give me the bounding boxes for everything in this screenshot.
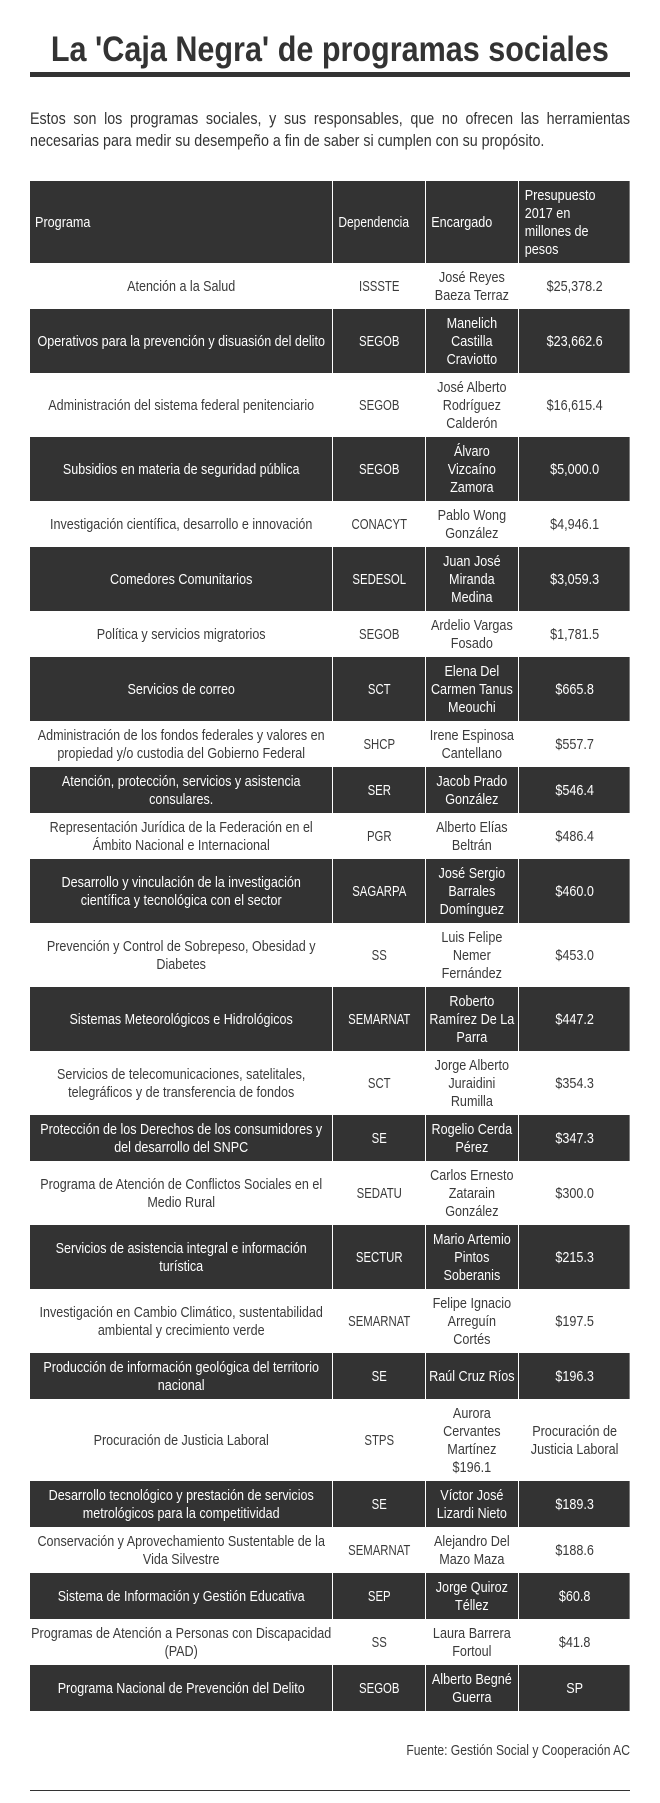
row: Justicia Laboral: Procuración de Justicia Laboral [94, 1432, 269, 1449]
row: Atención a la Salud: Baeza Terraz [435, 287, 509, 304]
row: Conflictos Sociales: Programa de Atención de Conflictos Sociales en el [40, 1176, 322, 1193]
row: Cambio Climático [30, 1289, 630, 1353]
row: Vida Silvestre: Conservación y Aprovechamiento Sustentable de la [37, 1533, 325, 1550]
row: Turística: SECTUR [356, 1249, 402, 1266]
row: Representación Jurídica: Alberto Elías [436, 819, 508, 836]
row: Sobrepeso: Nemer [453, 947, 491, 964]
table header row: Presupuesto [525, 187, 596, 204]
row: Gestión Educativa: Téllez [455, 1597, 489, 1614]
row: Operativos: Manelich [447, 315, 497, 332]
table header row: pesos [525, 241, 558, 258]
row: Fondos federales: $557.7 [555, 736, 594, 753]
row: Consulares: $546.4 [555, 782, 594, 799]
row: Atención a la Salud: $25,378.2 [547, 278, 603, 295]
table header row: millones de [525, 223, 589, 240]
row: Conflictos Sociales: González [445, 1203, 499, 1220]
intro text: Estos son los programas sociales, y sus responsables, que no ofrecen las herramientas [30, 109, 630, 128]
row: Discapacidad: (PAD) [165, 1643, 198, 1660]
row: Gestión Educativa [30, 1573, 630, 1619]
row: Desarrollo y vinculación: $460.0 [555, 883, 594, 900]
row: Justicia Laboral: Cervantes [443, 1423, 501, 1440]
row: Conflictos Sociales [30, 1161, 630, 1225]
row: Consulares: SER [367, 782, 391, 799]
row: Subsidios: SEGOB [359, 461, 399, 478]
intro text: necesarias para medir su desempeño a fin de saber si cumplen con su propósito. [30, 131, 544, 150]
row: Gestión Educativa: $60.8 [559, 1588, 590, 1605]
row: Vida Silvestre: $188.6 [555, 1542, 594, 1559]
row: Correo [30, 657, 630, 721]
table: programas sociales [30, 181, 630, 1711]
row: Correo: $665.8 [555, 681, 594, 698]
row: Investigación científica [30, 501, 630, 547]
row: Consumidores [30, 1115, 630, 1161]
row: Sistema penitenciario: Calderón [446, 415, 497, 432]
row: Justicia Laboral: $196.1 [453, 1459, 491, 1476]
row: Subsidios: Subsidios en materia de seguridad pública [63, 461, 299, 478]
row: Meteorológicos: SEMARNAT [348, 1011, 410, 1028]
row: Justicia Laboral: Justicia Laboral [531, 1441, 618, 1458]
row: Atención a la Salud: ISSSTE [359, 278, 399, 295]
row: Geológica: nacional [158, 1377, 205, 1394]
row: Atención a la Salud: Atención a la Salud [127, 278, 235, 295]
row: Política migratoria: $1,781.5 [550, 626, 599, 643]
row: Consulares: Atención, protección, servicios y asistencia [62, 773, 300, 790]
row: Geológica: $196.3 [555, 1368, 594, 1385]
row: Turística: Servicios de asistencia integral e información [56, 1240, 307, 1257]
row: Comedores: Medina [451, 589, 493, 606]
table header row [30, 181, 630, 263]
row: Telecomunicaciones: $354.3 [555, 1075, 594, 1092]
row: Prevención del Delito: SEGOB [359, 1680, 399, 1697]
row: Turística: $215.3 [555, 1249, 594, 1266]
table header row: Programa [35, 214, 90, 231]
row: Discapacidad: Programas de Atención a Personas con Discapacidad [31, 1625, 331, 1642]
row: Conflictos Sociales: SEDATU [356, 1185, 401, 1202]
row: Geológica: Raúl Cruz Ríos [429, 1368, 515, 1385]
row: Sistema penitenciario: Rodríguez [443, 397, 501, 414]
row: Subsidios: Vizcaíno [448, 461, 496, 478]
table header row: 2017 en [525, 205, 570, 222]
row: Consumidores: Protección de los Derechos de los consumidores y [40, 1121, 322, 1138]
row: Turística: Mario Artemio [433, 1231, 511, 1248]
row: Justicia Laboral: Aurora [453, 1405, 491, 1422]
row: Conflictos Sociales: Medio Rural [147, 1194, 215, 1211]
title underline bar [30, 72, 630, 77]
row: Sobrepeso [30, 923, 630, 987]
row: Justicia Laboral: STPS [364, 1432, 394, 1449]
row: Telecomunicaciones: SCT [368, 1075, 390, 1092]
row: Conflictos Sociales: $300.0 [555, 1185, 594, 1202]
row: Conflictos Sociales: Carlos Ernesto [430, 1167, 514, 1184]
row: Política migratoria: SEGOB [359, 626, 399, 643]
row: Consumidores: Rogelio Cerda [432, 1121, 512, 1138]
row: Sistema penitenciario: $16,615.4 [547, 397, 603, 414]
row: Correo: Meouchi [448, 699, 496, 716]
row: Investigación científica: González [445, 525, 498, 542]
row: Correo: Servicios de correo [127, 681, 235, 698]
row: Sobrepeso: Luis Felipe [441, 929, 502, 946]
row: Consulares [30, 767, 630, 813]
row: Sistema penitenciario: SEGOB [359, 397, 399, 414]
row: Operativos: Craviotto [447, 351, 497, 368]
row: Subsidios: $5,000.0 [550, 461, 599, 478]
row: Cambio Climático: ambiental y crecimiento verde [98, 1322, 265, 1339]
row: Cambio Climático: Cortés [453, 1331, 490, 1348]
row: Subsidios [30, 437, 630, 501]
row: Subsidios: Álvaro [454, 443, 490, 460]
row: Metrológicos: $189.3 [555, 1496, 594, 1513]
row: Sobrepeso: $453.0 [555, 947, 594, 964]
table header row: Encargado [431, 214, 492, 231]
row: Desarrollo y vinculación: Domínguez [440, 901, 504, 918]
row: Sobrepeso: Prevención y Control de Sobrepeso, Obesidad y [47, 938, 316, 955]
row: Metrológicos: metrológicos para la competitividad [83, 1505, 280, 1522]
row: Metrológicos: Lizardi Nieto [437, 1505, 507, 1522]
row: Discapacidad: Fortoul [452, 1643, 491, 1660]
row: Subsidios: Zamora [450, 479, 494, 496]
row: Comedores [30, 547, 630, 611]
row: Meteorológicos: Roberto [449, 993, 494, 1010]
row: Operativos: Operativos para la prevención y disuasión del delito [37, 333, 325, 350]
row: Prevención del Delito: Guerra [452, 1689, 491, 1706]
row: Representación Jurídica: PGR [367, 828, 391, 845]
row: Fondos federales: Administración de los fondos federales y valores en [38, 727, 325, 744]
row: Cambio Climático: Investigación en Cambio Climático, sustentabilidad [40, 1304, 323, 1321]
intro text [30, 109, 630, 150]
row: Operativos: SEGOB [359, 333, 399, 350]
row: Consumidores: SE [371, 1130, 386, 1147]
row: Gestión Educativa: Jorge Quiroz [436, 1579, 508, 1596]
row: Investigación científica: Pablo Wong [438, 507, 506, 524]
row: Meteorológicos: Sistemas Meteorológicos e Hidrológicos [70, 1011, 293, 1028]
row: Turística: Soberanis [443, 1267, 500, 1284]
row: Representación Jurídica: $486.4 [555, 828, 594, 845]
row: Discapacidad [30, 1619, 630, 1665]
row: Telecomunicaciones [30, 1051, 630, 1115]
row: Política migratoria [30, 611, 630, 657]
row: Justicia Laboral: Procuración de [532, 1423, 617, 1440]
row: Geológica: Producción de información geológica del territorio [43, 1359, 319, 1376]
row: Fondos federales: propiedad y/o custodia del Gobierno Federal [57, 745, 305, 762]
row: Sobrepeso: SS [371, 947, 386, 964]
row: Metrológicos: SE [371, 1496, 386, 1513]
row: Meteorológicos [30, 987, 630, 1051]
row: Discapacidad: $41.8 [559, 1634, 590, 1651]
row: Consulares: Jacob Prado [436, 773, 507, 790]
row: Vida Silvestre: Alejandro Del [434, 1533, 510, 1550]
row: Sistema penitenciario: José Alberto [437, 379, 507, 396]
row: Representación Jurídica [30, 813, 630, 859]
row: Sistema penitenciario: Administración del sistema federal penitenciario [48, 397, 314, 414]
row: Prevención del Delito: SP [566, 1680, 583, 1697]
row: Vida Silvestre: SEMARNAT [348, 1542, 410, 1559]
row: Fondos federales: Irene Espinosa [430, 727, 514, 744]
row: Prevención del Delito [30, 1665, 630, 1711]
row: Cambio Climático: Arreguín [448, 1313, 496, 1330]
row: Política migratoria: Ardelio Vargas [431, 617, 513, 634]
row: Política migratoria: Política y servicios migratorios [97, 626, 266, 643]
row: Representación Jurídica: Beltrán [452, 837, 492, 854]
row: Conflictos Sociales: Zatarain [449, 1185, 495, 1202]
row: Investigación científica: $4,946.1 [550, 516, 599, 533]
row: Comedores: SEDESOL [352, 571, 406, 588]
row: Telecomunicaciones: Juraidini [448, 1075, 495, 1092]
row: Atención a la Salud [30, 263, 630, 309]
row: Prevención del Delito: Programa Nacional de Prevención del Delito [58, 1680, 305, 1697]
row: Representación Jurídica: Representación Jurídica de la Federación en el [50, 819, 313, 836]
row: Consumidores: del desarrollo del SNPC [114, 1139, 248, 1156]
row: Correo: SCT [368, 681, 390, 698]
row: Desarrollo y vinculación: SAGARPA [352, 883, 406, 900]
row: Consulares: González [445, 791, 498, 808]
row: Geológica [30, 1353, 630, 1399]
row: Comedores: Juan José [443, 553, 501, 570]
row: Investigación científica: CONACYT [351, 516, 407, 533]
row: Telecomunicaciones: Rumilla [451, 1093, 493, 1110]
row: Desarrollo y vinculación: José Sergio [439, 865, 505, 882]
row: Correo: Elena Del [444, 663, 499, 680]
row: Investigación científica: Investigación científica, desarrollo e innovación [50, 516, 312, 533]
row: Gestión Educativa: Sistema de Información y Gestión Educativa [58, 1588, 305, 1605]
row: Desarrollo y vinculación: Desarrollo y vinculación de la investigación [62, 874, 301, 891]
row: Política migratoria: Fosado [451, 635, 493, 652]
row: Telecomunicaciones: Jorge Alberto [435, 1057, 509, 1074]
row: Turística: turística [159, 1258, 203, 1275]
row: Operativos [30, 309, 630, 373]
row: Cambio Climático: SEMARNAT [348, 1313, 410, 1330]
row: Correo: Carmen Tanus [431, 681, 513, 698]
row: Metrológicos [30, 1481, 630, 1527]
row: Desarrollo y vinculación: Barrales [448, 883, 495, 900]
row: Consumidores: Pérez [455, 1139, 488, 1156]
row: Fondos federales: SHCP [363, 736, 395, 753]
row: Desarrollo y vinculación [30, 859, 630, 923]
row: Fondos federales: Cantellano [442, 745, 502, 762]
table header row: Dependencia [338, 214, 409, 231]
source note: Fuente: Gestión Social y Cooperación AC [406, 1742, 630, 1759]
row: Metrológicos: Desarrollo tecnológico y prestación de servicios [49, 1487, 314, 1504]
row: Metrológicos: Víctor José [440, 1487, 503, 1504]
title: La 'Caja Negra' de programas sociales [51, 30, 609, 69]
row: Telecomunicaciones: Servicios de telecomunicaciones, satelitales, [57, 1066, 305, 1083]
row: Vida Silvestre: Vida Silvestre [143, 1551, 219, 1568]
row: Prevención del Delito: Alberto Begné [432, 1671, 512, 1688]
row: Comedores: $3,059.3 [550, 571, 599, 588]
row: Justicia Laboral [30, 1399, 630, 1481]
row: Vida Silvestre: Mazo Maza [439, 1551, 504, 1568]
row: Consulares: consulares. [149, 791, 213, 808]
row: Telecomunicaciones: telegráficos y de transferencia de fondos [68, 1084, 294, 1101]
row: Gestión Educativa: SEP [368, 1588, 390, 1605]
row: Desarrollo y vinculación: científica y tecnológica con el sector [81, 892, 282, 909]
row: Sobrepeso: Fernández [442, 965, 502, 982]
row: Meteorológicos: Ramírez De La [429, 1011, 514, 1028]
row: Comedores: Comedores Comunitarios [110, 571, 252, 588]
row: Meteorológicos: Parra [456, 1029, 487, 1046]
row: Discapacidad: SS [371, 1634, 386, 1651]
row: Geológica: SE [371, 1368, 386, 1385]
row: Meteorológicos: $447.2 [555, 1011, 594, 1028]
row: Sistema penitenciario [30, 373, 630, 437]
row: Representación Jurídica: Ámbito Nacional e Internacional [93, 837, 270, 854]
row: Fondos federales [30, 721, 630, 767]
row: Discapacidad: Laura Barrera [433, 1625, 511, 1642]
row: Cambio Climático: Felipe Ignacio [433, 1295, 511, 1312]
row: Consumidores: $347.3 [555, 1130, 594, 1147]
row: Sobrepeso: Diabetes [156, 956, 206, 973]
row: Atención a la Salud: José Reyes [439, 269, 505, 286]
row: Justicia Laboral: Martínez [447, 1441, 496, 1458]
row: Operativos: Castilla [451, 333, 493, 350]
row: Operativos: $23,662.6 [547, 333, 603, 350]
footer rule [30, 1790, 630, 1791]
row: Comedores: Miranda [449, 571, 495, 588]
row: Cambio Climático: $197.5 [555, 1313, 594, 1330]
row: Turística: Pintos [454, 1249, 489, 1266]
row: Vida Silvestre [30, 1527, 630, 1573]
row: Turística [30, 1225, 630, 1289]
